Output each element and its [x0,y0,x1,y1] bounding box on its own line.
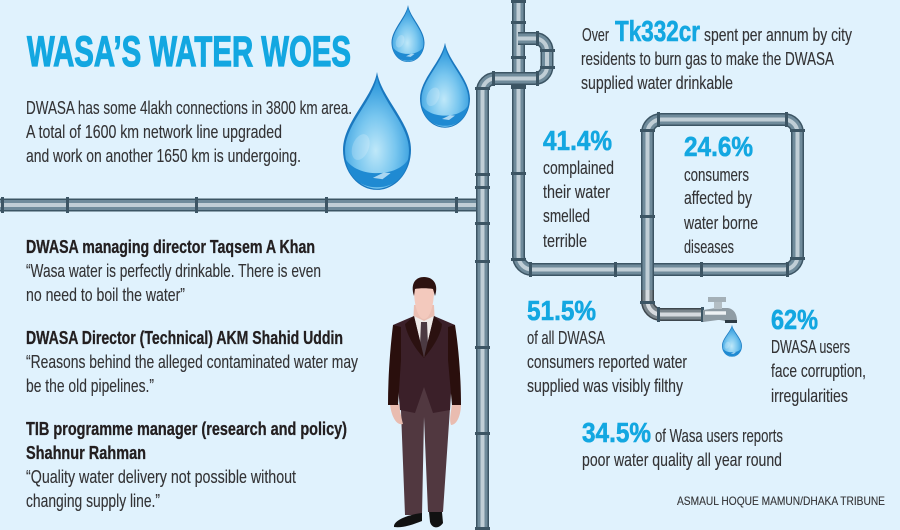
stat: 24.6%: 24.6% [684,131,753,162]
stat: 41.4%: terrible [543,231,587,251]
stat: 51.5%: consumers reported water [527,352,687,372]
stat: 41.4%: their water [543,182,610,202]
quote: Shahnur Rahman [26,419,347,511]
intro text: DWASA has some 4lakh connections in 3800 km area. [26,98,352,118]
stat: 24.6%: consumers [684,165,749,185]
quote: AKM Shahid Uddin [26,328,358,396]
stat: 62%: irregularities [771,386,848,406]
intro text [26,98,352,166]
top stat: Tk332cr: Over [582,25,609,45]
icon: man in suit [388,277,461,527]
quote: Shahnur Rahman: Shahnur Rahman [26,443,146,463]
stat: 62% [771,304,866,406]
stat: 62%: face corruption, [771,361,866,381]
stat: 41.4%: complained [543,158,614,178]
title: WASA’S WATER WOES [27,28,351,76]
icon: faucet [703,297,742,357]
quote: AKM Shahid Uddin: “Reasons behind the alleged contaminated water may [26,352,358,372]
stat: 24.6%: affected by [684,188,752,208]
stat: 24.6% [683,131,758,257]
top stat: Tk332cr: spent per annum by city [704,25,852,45]
top stat: Tk332cr: Tk332cr [615,16,700,48]
top stat: Tk332cr: supplied water drinkable [581,73,733,93]
quote: AKM Shahid Uddin: be the old pipelines.” [26,376,154,396]
stat: 34.5%: of Wasa users reports [655,426,783,446]
stat: 34.5% [582,417,783,470]
stat: 41.4% [543,125,614,251]
quote: Shahnur Rahman: TIB programme manager (research and policy) [26,419,347,439]
stat: 62%: DWASA users [771,337,850,357]
intro text: A total of 1600 km network line upgraded [26,122,282,142]
quote: AKM Shahid Uddin: DWASA Director (Technical) AKM Shahid Uddin [26,328,343,348]
icon: water drops [343,5,470,190]
intro text: and work on another 1650 km is undergoing. [26,146,301,166]
quote: Shahnur Rahman: changing supply line.” [26,491,160,511]
stat: 41.4%: smelled [543,206,590,226]
quote: Taqsem A Khan [26,237,321,305]
quote: Taqsem A Khan: DWASA managing director Taqsem A Khan [26,237,315,257]
quote: Taqsem A Khan: “Wasa water is perfectly drinkable. There is even [26,261,321,281]
stat: 62%: 62% [771,304,818,335]
stat: 34.5%: poor water quality all year round [582,450,782,470]
stat: 41.4%: 41.4% [543,125,612,156]
top stat: Tk332cr [581,16,852,93]
stat: 24.6%: diseases [684,237,734,257]
stat: 51.5%: 51.5% [527,295,596,326]
stat: 51.5%: of all DWASA [527,328,605,348]
quote: Shahnur Rahman: “Quality water delivery not possible without [26,467,296,487]
stat: 51.5%: supplied was visibly filthy [527,376,683,396]
stat: 34.5%: 34.5% [582,417,651,448]
quote: Taqsem A Khan: no need to boil the water” [26,285,185,305]
stat: 51.5% [527,295,687,396]
stat: 24.6%: water borne [683,213,758,233]
